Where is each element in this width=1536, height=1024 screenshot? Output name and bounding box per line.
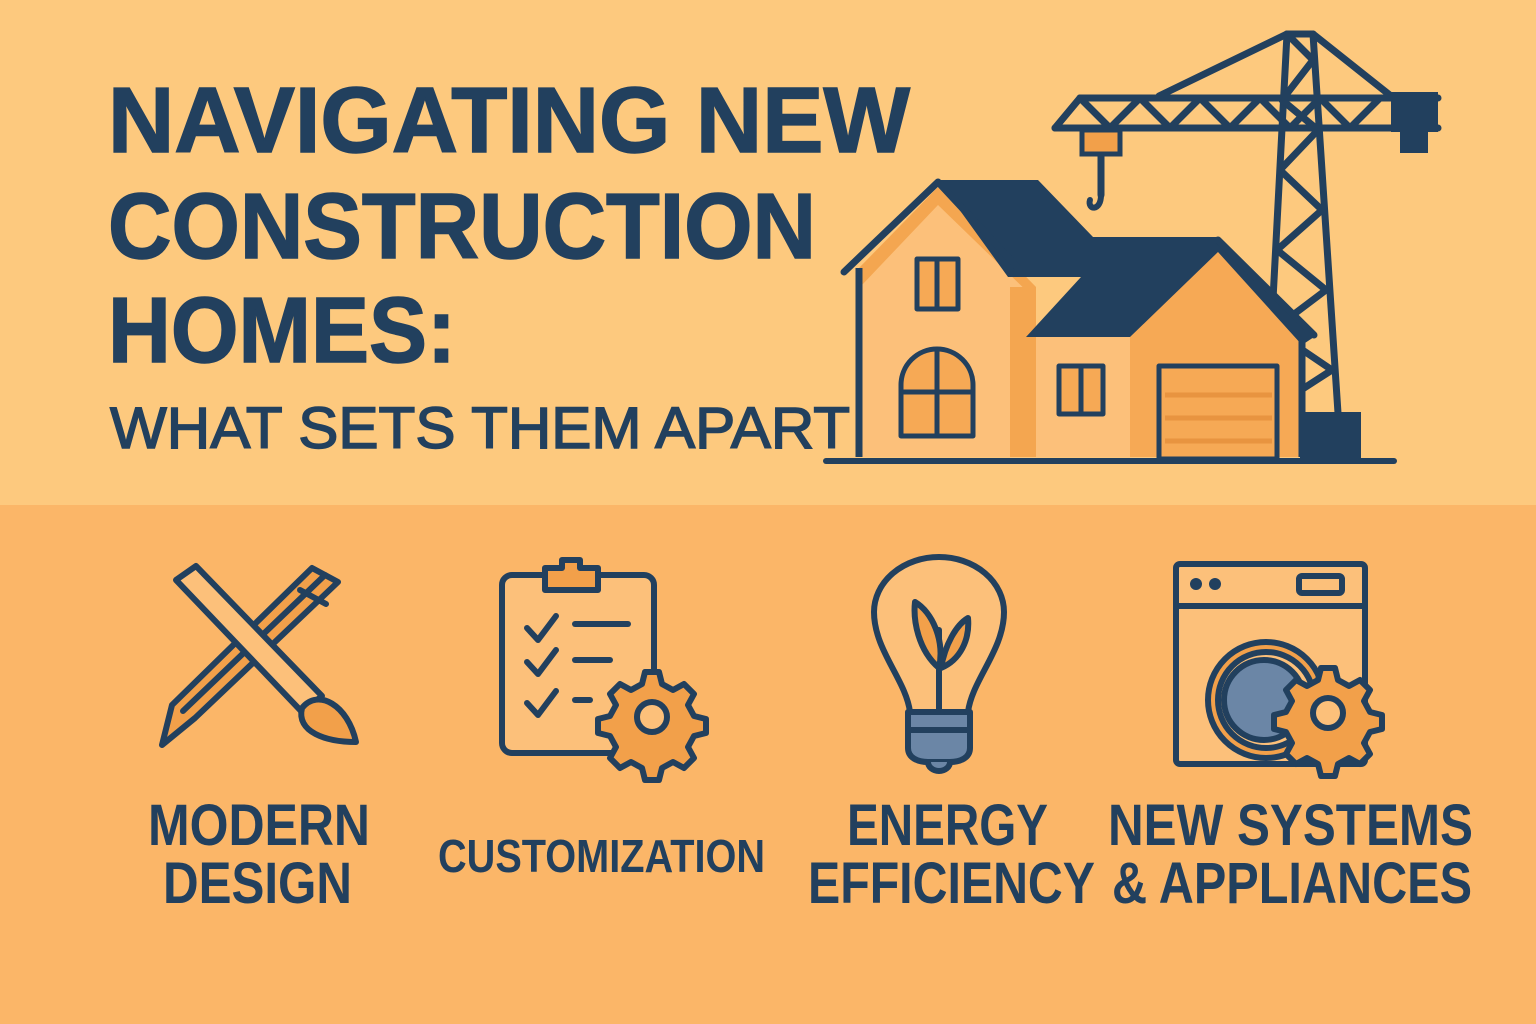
illustration: house	[826, 180, 1394, 461]
label: new systems & appliances: NEW SYSTEMS	[1108, 793, 1473, 858]
label: energy efficiency	[808, 793, 1095, 916]
title: HOMES:	[108, 278, 456, 382]
label: energy efficiency: ENERGY	[847, 793, 1048, 858]
label: modern design	[148, 793, 370, 916]
title: CONSTRUCTION	[108, 174, 816, 278]
illustration: crane	[1055, 34, 1438, 413]
title: NAVIGATING NEW	[108, 68, 910, 172]
label: energy efficiency: EFFICIENCY	[808, 851, 1095, 916]
label: modern design: MODERN	[148, 793, 370, 858]
icon: light bulb with sprout	[874, 557, 1004, 771]
label: new systems & appliances	[1108, 793, 1473, 916]
icon: clipboard checklist	[502, 560, 706, 780]
label: modern design: DESIGN	[163, 851, 352, 916]
icon: pencil and brush	[162, 566, 356, 745]
title	[108, 68, 910, 382]
icon: washing machine with gear	[1176, 564, 1382, 776]
label: new systems & appliances: & APPLIANCES	[1112, 851, 1472, 916]
subtitle: WHAT SETS THEM APART	[110, 396, 850, 461]
crane counterweight & trolley	[1082, 92, 1438, 460]
label: customization: CUSTOMIZATION	[438, 830, 765, 882]
